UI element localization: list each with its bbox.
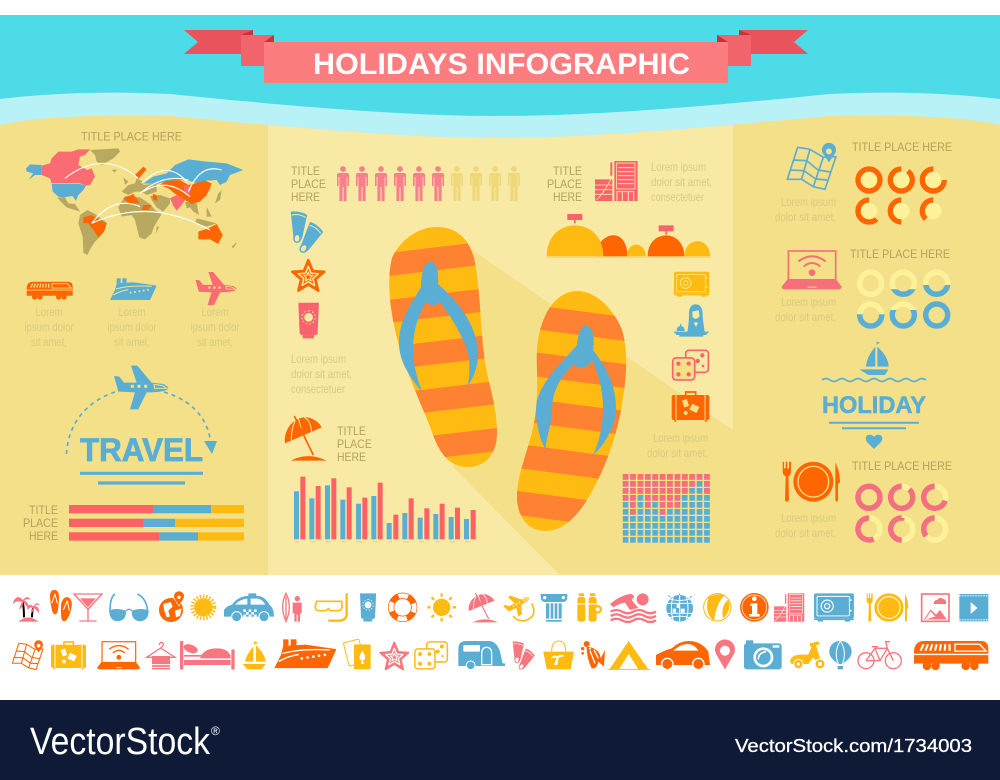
people label: TITLE: [291, 164, 320, 178]
icon: camera: [744, 640, 782, 669]
icon strip: left section: [12, 590, 347, 670]
icon: car: [656, 641, 710, 670]
pink donuts: [854, 482, 950, 544]
icon: plane round: [500, 588, 535, 621]
icon: balloon: [829, 641, 852, 669]
travel underlines: [80, 473, 203, 483]
pictogram row: [337, 166, 520, 201]
caption: dolor sit amet,: [647, 446, 708, 460]
transport captions: Lorem: [118, 305, 146, 319]
icon: beach umbrella: [285, 416, 327, 461]
icon: ship: [110, 278, 157, 300]
caption: Lorem ipsum: [291, 352, 346, 366]
bar chart: Feb: [310, 540, 316, 544]
icon: pink flippers: [511, 641, 536, 672]
stacked bars: [69, 505, 244, 541]
icon: beach bag: [543, 641, 574, 669]
icon: ship small: [274, 639, 336, 668]
caption: [291, 352, 352, 396]
icon: bright sun: [427, 593, 456, 621]
heading: TITLE PLACE HERE: [852, 459, 952, 473]
icon: bicycle: [858, 642, 901, 669]
icon: snorkel: [315, 593, 347, 621]
icon: sunscreen small: [360, 593, 376, 622]
icon: big bus: [914, 641, 988, 670]
icon: lifebuoy: [388, 593, 417, 622]
heading: TITLE PLACE HERE: [852, 140, 952, 154]
umbrella label: PLACE: [337, 437, 372, 451]
wave line: [822, 378, 926, 382]
travel wordmark: TRAVEL: [80, 432, 203, 468]
centre panel: [268, 110, 733, 575]
icon: picture: [922, 594, 949, 621]
footer url: VectorStock.com/1734003: [735, 736, 972, 756]
stacked bars label: HERE: [29, 529, 58, 543]
icon: yellow plate: [867, 593, 908, 622]
icon: disco ball: [666, 593, 693, 622]
caption: Lorem ipsum: [781, 511, 836, 525]
icon: safe: [674, 272, 709, 297]
bar chart: Nov: [450, 540, 455, 544]
registered mark: ®: [211, 724, 220, 738]
icon: palm island: [12, 597, 40, 622]
bar chart: Jan: [295, 540, 300, 544]
icon: scooter: [790, 641, 825, 669]
long flip-flop shadow: [453, 245, 733, 575]
icon: pink starfish: [380, 643, 408, 669]
right flip-flop: [517, 291, 626, 531]
caption: [775, 195, 836, 224]
sea: [0, 15, 1000, 145]
icon: plane: [196, 272, 237, 305]
icon: flippers: [288, 211, 325, 257]
icon: starfish: [292, 260, 324, 291]
umbrella label: [337, 424, 372, 464]
foam wave: [0, 93, 1000, 150]
icon: fish: [581, 641, 605, 668]
icon: martini: [74, 594, 102, 621]
dome chart: [546, 214, 711, 257]
icon: video: [959, 594, 988, 621]
icon: bus: [27, 282, 73, 300]
bar chart: Apr: [342, 540, 346, 544]
umbrella label: HERE: [337, 450, 366, 464]
icon: column: [541, 594, 567, 622]
hotel label: HERE: [553, 190, 582, 204]
icon: laptop wifi: [782, 251, 842, 289]
icon strip: middle section: [343, 588, 656, 672]
stacked bars label: [23, 503, 58, 543]
footer bar: [0, 700, 1000, 780]
caption: [775, 511, 836, 540]
transport captions: sit amet,: [114, 335, 150, 349]
caption: dolor sit amet,: [775, 310, 836, 324]
icon: travel plane: [114, 366, 168, 409]
transport captions: sit amet,: [31, 335, 67, 349]
icon: bed: [180, 641, 235, 670]
bar chart: Oct: [435, 540, 439, 544]
waffle chart: [623, 474, 712, 544]
caption: dolor sit amet,: [291, 367, 352, 381]
bar chart: Aug: [403, 540, 409, 544]
holiday underlines: [829, 423, 919, 428]
people label: PLACE: [291, 177, 326, 191]
icon: heart: [866, 435, 882, 449]
icon: laptop small: [97, 642, 140, 669]
caption: [775, 295, 836, 324]
footer logo: VectorStock: [30, 721, 211, 763]
icon: dice: [673, 350, 708, 380]
hotel caption: Lorem ipsum: [651, 160, 706, 174]
icon: pink umbrella: [469, 593, 498, 622]
bar chart: Mar: [326, 540, 331, 544]
dashed flight arc: [66, 392, 217, 454]
bar chart: May: [357, 540, 363, 544]
blue donuts: [860, 272, 948, 326]
icon strip: right section: [656, 593, 988, 670]
hotel label: TITLE: [553, 164, 582, 178]
icon: folded map: [787, 143, 836, 189]
icon: globe pin: [159, 591, 184, 622]
hotel caption: consectetuer: [651, 190, 704, 204]
caption: dolor sit amet,: [775, 210, 836, 224]
title: HOLIDAYS INFOGRAPHIC: [313, 48, 690, 81]
icon: yellow suitcase: [51, 642, 86, 670]
people label: HERE: [291, 190, 320, 204]
icon: small hotel: [774, 593, 804, 622]
transport captions: Lorem: [202, 305, 229, 319]
icon: folded map small: [12, 640, 43, 670]
title ribbon: [184, 30, 808, 83]
bar chart: Jun: [373, 540, 378, 544]
transport captions: ipsum dolor: [24, 320, 74, 334]
bar chart: Jul: [388, 540, 393, 544]
icon: caravan: [458, 641, 505, 670]
icon: cards: [343, 639, 371, 669]
transport captions: [24, 305, 240, 349]
icon: location pin: [715, 639, 735, 669]
icon: sunglasses: [109, 594, 149, 621]
icon: scuba tanks: [577, 593, 602, 622]
world map: [26, 148, 243, 255]
hotel caption: dolor sit amet,: [651, 175, 712, 189]
icon: sailboat: [859, 341, 889, 375]
icon: info: [740, 593, 769, 622]
bar chart: [294, 477, 476, 544]
icon: sun: [193, 597, 214, 618]
transport captions: ipsum dolor: [190, 320, 240, 334]
bar chart: Sep: [419, 540, 424, 544]
caption: [647, 431, 708, 460]
caption: Lorem ipsum: [781, 295, 836, 309]
icon: hanger towel: [147, 642, 175, 669]
sand: [0, 115, 1000, 575]
caption: Lorem ipsum: [653, 431, 708, 445]
transport captions: Lorem: [36, 305, 63, 319]
icon: blue safe: [814, 593, 854, 622]
icon: tent: [608, 641, 650, 669]
holiday wordmark: HOLIDAY: [822, 392, 926, 419]
stacked bars label: TITLE: [29, 503, 58, 517]
caption: dolor sit amet,: [775, 526, 836, 540]
icon: taxi: [224, 593, 274, 622]
left heading: TITLE PLACE HERE: [81, 130, 182, 144]
icon: suitcase: [672, 392, 709, 422]
hotel label: [547, 164, 582, 204]
bar chart: Dec: [465, 540, 471, 544]
icon: yellow dice: [415, 642, 447, 669]
icon: beach ball: [704, 594, 731, 621]
icon: sunscreen: [298, 303, 319, 338]
icon: flip flops: [50, 590, 72, 621]
icon: hotel: [595, 161, 638, 201]
transport captions: ipsum dolor: [108, 320, 156, 334]
hotel caption: [651, 160, 712, 204]
caption: Lorem ipsum: [781, 195, 836, 209]
icon: swimmer: [610, 593, 656, 622]
icon: surfer: [283, 593, 302, 622]
caption: consectetuer: [291, 382, 345, 396]
left flip-flop: [389, 227, 497, 467]
heading: TITLE PLACE HERE: [850, 247, 950, 261]
umbrella label: TITLE: [337, 424, 366, 438]
hotel label: PLACE: [547, 177, 582, 191]
orange donuts: [853, 165, 949, 227]
people label: [291, 164, 326, 204]
icon: plate cutlery: [783, 462, 840, 502]
transport captions: sit amet,: [197, 335, 233, 349]
icon: sailboat small: [243, 641, 266, 669]
icon: receptionist: [673, 304, 709, 337]
stacked bars label: PLACE: [23, 516, 58, 530]
